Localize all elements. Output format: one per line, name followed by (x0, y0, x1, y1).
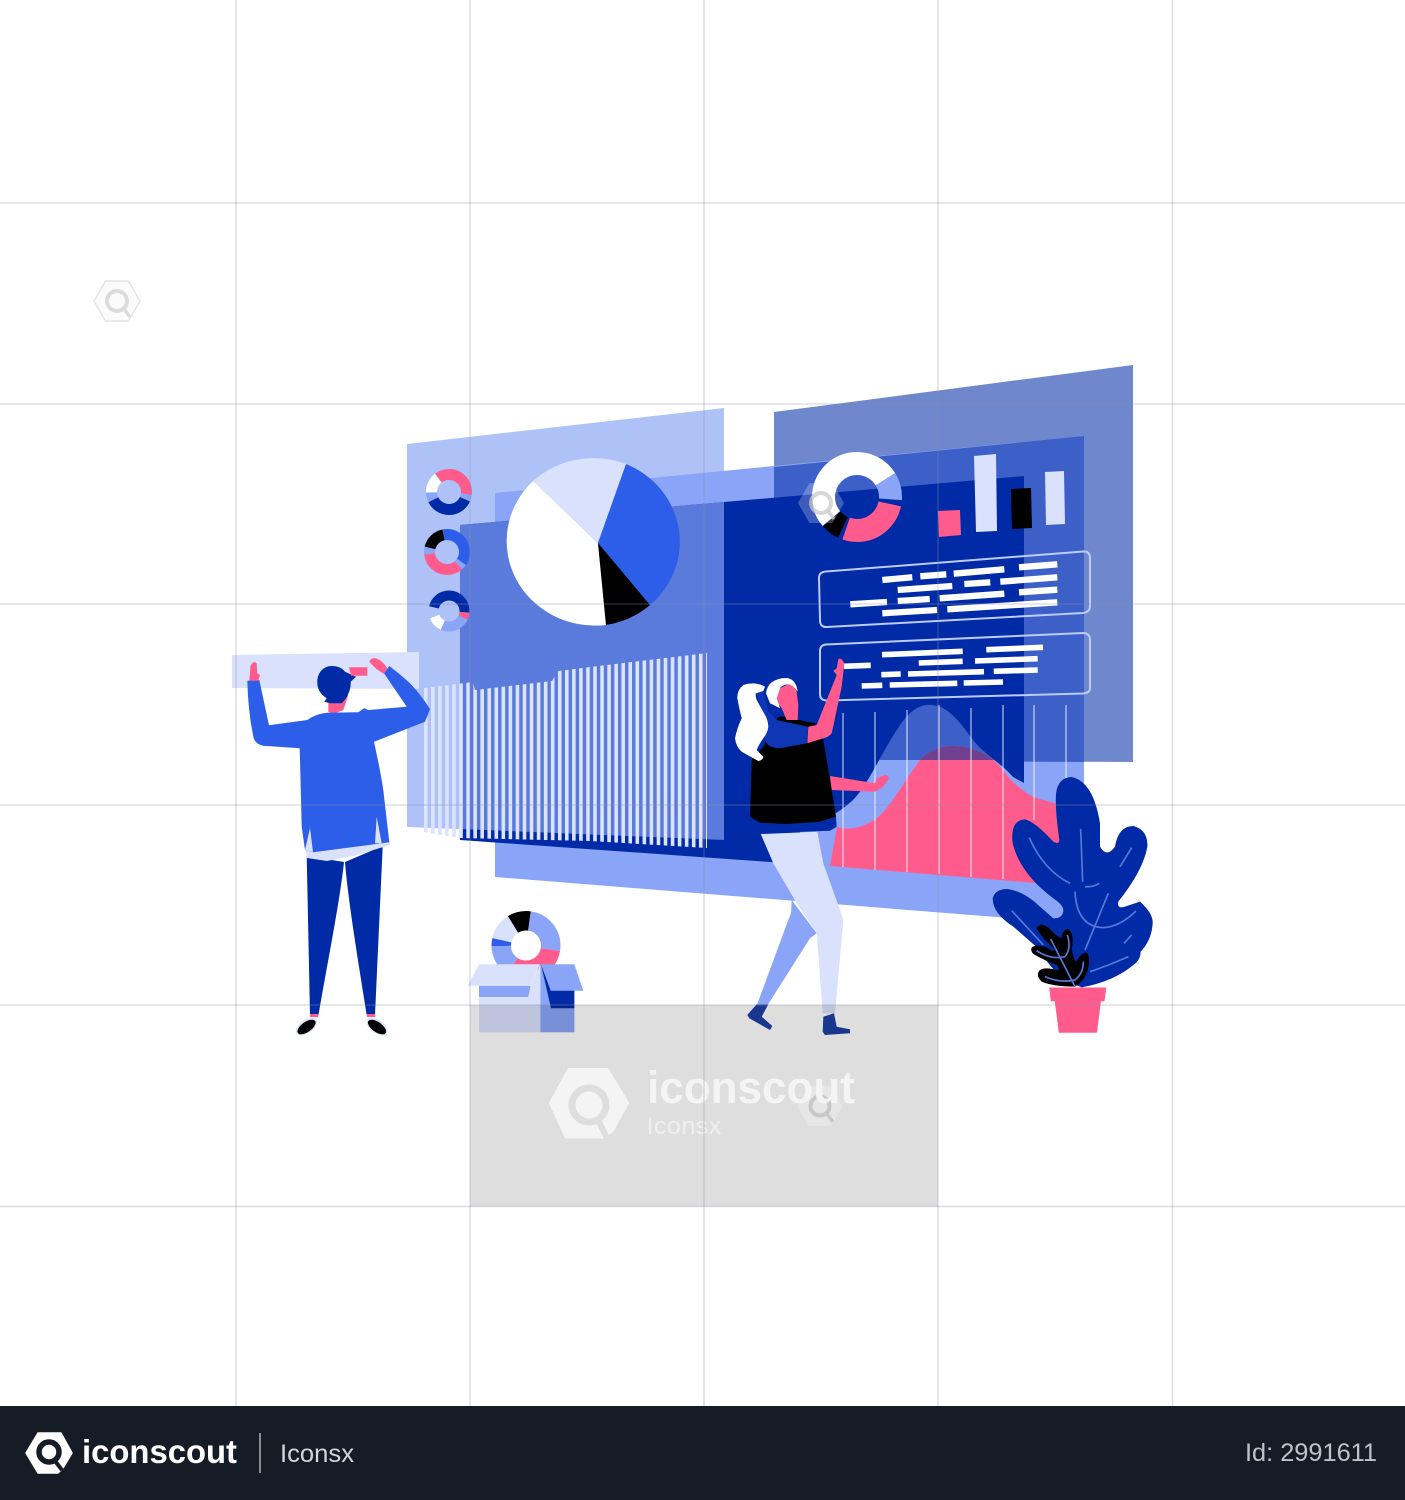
icon: open box (468, 964, 583, 1032)
man neck (328, 695, 348, 714)
footer bar (0, 1406, 1405, 1500)
bar: short light (1045, 471, 1065, 525)
woman back leg (757, 900, 817, 1004)
bar: tall light (974, 454, 997, 532)
callout: upper text box (819, 551, 1090, 627)
chart: large donut (824, 464, 890, 530)
panel: translucent top right screen (774, 365, 1133, 762)
panel: dark blue main screen (460, 476, 1024, 880)
watermark: small hexagon on donut (798, 483, 844, 523)
text lines: upper box (850, 564, 1057, 613)
grid lines of the area chart (843, 705, 1066, 879)
watermark magnifier (572, 1088, 608, 1140)
box flap shadow (479, 986, 531, 997)
woman raised arm (807, 659, 844, 743)
chart: bar chart (938, 454, 1065, 537)
pie slice: light (533, 458, 626, 543)
bell curve upper (879, 704, 994, 760)
panel: overlap of middle and top right screens (774, 436, 1084, 762)
plant pot rim (1050, 988, 1106, 1000)
man legs (307, 846, 383, 1015)
chart: small donut 1 (432, 474, 466, 510)
panel: periwinkle middle screen (495, 436, 1084, 924)
man jacket vents (305, 817, 382, 852)
watermark: small hexagon upper left (94, 281, 140, 321)
icon: donut coming out of box (501, 921, 551, 970)
box dark inside (541, 964, 574, 1008)
bar: pink (938, 510, 961, 537)
woman front hair (766, 678, 798, 708)
chart: small donut 3 (434, 596, 464, 626)
woman top (750, 716, 836, 824)
pink area (830, 746, 1060, 885)
box left flap (468, 964, 540, 986)
plant pot body (1056, 1001, 1100, 1032)
man shoes (293, 1014, 391, 1039)
text lines: lower box (844, 647, 1043, 686)
chart: small donut 2 (430, 534, 464, 570)
footer logo (26, 1433, 72, 1473)
man hair (317, 666, 356, 703)
pink area overlap (920, 746, 994, 760)
callout: lower text box (820, 633, 1090, 700)
footer author: Iconsx (280, 1440, 354, 1468)
woman outstretched arm (830, 774, 889, 792)
woman back foot (747, 1004, 772, 1030)
box front (479, 986, 540, 1032)
pie slice: blue (598, 464, 680, 605)
person: woman (735, 659, 889, 1035)
panel: overlap of light and dark screens (460, 502, 724, 840)
box inner front (528, 964, 540, 997)
pie slice: black (598, 543, 650, 625)
man jacket (247, 666, 430, 852)
woman sleeve (756, 691, 808, 748)
watermark: grey block (470, 1005, 938, 1206)
highlight band behind man (232, 652, 419, 689)
man right hand (369, 658, 387, 674)
bar: black (1011, 488, 1032, 529)
woman ponytail (735, 683, 768, 761)
man socks (310, 1014, 376, 1017)
person: man (247, 658, 430, 1039)
watermark hexagon (550, 1070, 628, 1137)
plant large leaves (993, 777, 1153, 987)
man left hand (249, 662, 260, 681)
panel: light left screen (407, 408, 724, 840)
woman front foot (823, 1013, 850, 1035)
footer brand: iconscout (82, 1433, 237, 1470)
watermark author: Iconsx (646, 1113, 722, 1140)
chart: area chart (800, 705, 1066, 885)
chart: pie (507, 458, 680, 626)
watermark: large logo (550, 1062, 855, 1140)
bell curve lower (800, 760, 1024, 869)
man shirt hem (305, 838, 390, 861)
chart: striped bars (424, 645, 710, 855)
footer id: Id: 2991611 (1245, 1439, 1377, 1467)
woman waistband (750, 817, 837, 833)
woman face (775, 684, 798, 720)
watermark: small hexagon in grey block (797, 1086, 843, 1126)
watermark wordmark: iconscout (647, 1062, 855, 1113)
pie slice: white (507, 481, 606, 626)
footer divider (259, 1433, 261, 1473)
box right flap (541, 964, 583, 991)
woman front leg (761, 832, 843, 1013)
box side (540, 965, 574, 1032)
man pink device (349, 667, 367, 676)
plant small black leaf (1031, 925, 1089, 987)
icon: potted plant (993, 777, 1153, 1032)
